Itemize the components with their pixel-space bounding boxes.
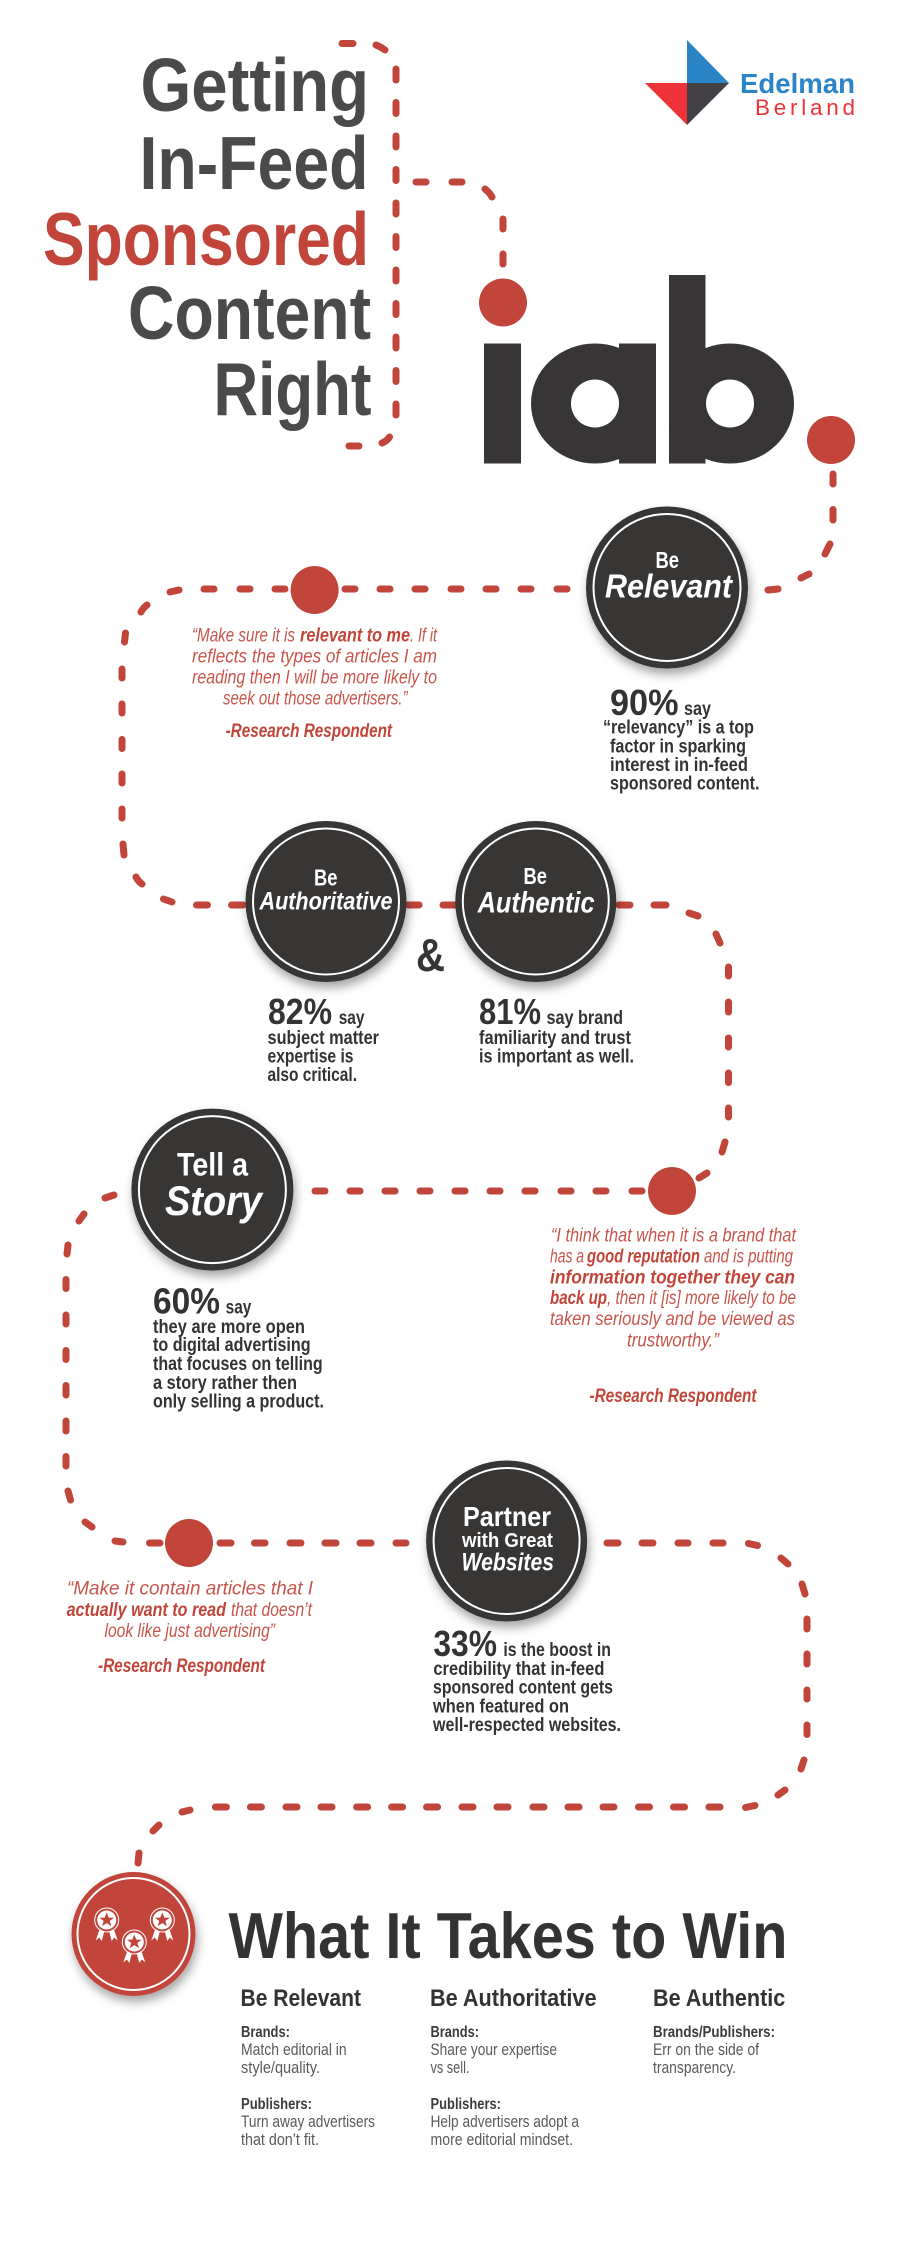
stat: 90%: interest in in-feed	[610, 754, 748, 776]
badge: Partner with Great Websites	[426, 1460, 587, 1622]
quote: good reputation: trustworthy.”	[627, 1331, 720, 1352]
dashed path: story to partner	[66, 1195, 406, 1543]
quote: actually want to read: that doesn’t	[231, 1600, 313, 1621]
stat: 33%: credibility that in-feed	[433, 1658, 604, 1680]
stat: 90%: say	[684, 698, 711, 720]
stat: 60%: 60%	[153, 1280, 220, 1321]
badge: Be Authentic: Be	[524, 863, 547, 889]
stat: 33%	[432, 1623, 621, 1736]
quote: relevant to me: . If it	[410, 626, 438, 647]
logo: Edelman Berland	[645, 40, 855, 125]
quote: relevant to me: seek out those advertisers.”	[223, 689, 409, 710]
quote: good reputation: -Research Respondent	[590, 1386, 757, 1407]
quote: actually want to read: look like just advertising”	[104, 1621, 276, 1642]
quote: actually want to read	[67, 1579, 314, 1677]
red dot: quote 3	[165, 1519, 213, 1567]
column: Be Authoritative: Be Authoritative	[430, 1985, 596, 2012]
stat: 33%: well-respected websites.	[432, 1714, 621, 1736]
stat: 33%: when featured on	[432, 1695, 569, 1717]
quote: relevant to me	[192, 626, 438, 742]
stat: 82%: also critical.	[268, 1064, 357, 1086]
column: Be Authentic: transparency.	[653, 2059, 736, 2077]
logo: Edelman Berland: Edelman	[740, 68, 855, 99]
icon: medal center	[122, 1930, 146, 1963]
stat: 81%: is important as well.	[479, 1046, 634, 1068]
red dot: quote 2	[648, 1167, 696, 1215]
title: In-Feed	[140, 121, 368, 205]
stat: 33%: 33%	[433, 1623, 497, 1664]
stat: 60%: they are more open	[153, 1316, 305, 1338]
column: Be Authoritative: vs sell.	[430, 2059, 470, 2077]
title: Sponsored	[43, 197, 369, 281]
stat: 90%: sponsored content.	[610, 773, 760, 795]
column: Be Authoritative: Help advertisers adopt a	[430, 2113, 580, 2131]
column: Be Authentic	[653, 1985, 785, 2077]
badge: Be Relevant	[586, 506, 748, 668]
stat: 60%: to digital advertising	[153, 1334, 311, 1356]
quote: relevant to me: reflects the types of articles I am	[192, 647, 437, 668]
quote: good reputation: and is putting	[704, 1246, 793, 1268]
icon: medal right	[150, 1908, 174, 1941]
badge: Be Authoritative: Be	[314, 864, 338, 890]
quote: relevant to me: -Research Respondent	[226, 721, 393, 742]
column: Be Authoritative: Publishers:	[430, 2096, 501, 2113]
quote: good reputation: information together they can	[550, 1268, 795, 1289]
stat: 60%: a story rather then	[153, 1372, 297, 1394]
column: Be Authoritative: more editorial mindset.	[430, 2131, 573, 2149]
badge: Partner with Great Websites: Websites	[462, 1549, 554, 1577]
ampersand: &	[416, 929, 445, 981]
stat: 33%: is the boost in	[503, 1639, 611, 1661]
stat: 60%: say	[226, 1296, 252, 1318]
quote: actually want to read: “Make it contain articles that I	[67, 1579, 314, 1600]
stat: 60%: only selling a product.	[153, 1391, 324, 1413]
quote: relevant to me: reading then I will be more likely to	[192, 668, 437, 689]
badge: Be Authoritative	[246, 821, 406, 982]
quote: good reputation: taken seriously and be viewed as	[550, 1309, 795, 1330]
dashed path: relevant to authoritative	[122, 589, 567, 905]
column: Be Relevant: that don’t fit.	[241, 2131, 319, 2149]
badge: Be Relevant: Be	[656, 547, 679, 573]
logo: iab	[484, 275, 794, 464]
column: Be Authoritative: Share your expertise	[430, 2041, 557, 2059]
badge: Tell a Story	[131, 1109, 293, 1271]
stat: 82%: 82%	[268, 991, 332, 1032]
column: Be Relevant: style/quality.	[241, 2059, 320, 2077]
column: Be Authoritative: Brands:	[430, 2024, 479, 2041]
column: Be Relevant: Publishers:	[241, 2096, 312, 2113]
quote: relevant to me: relevant to me	[300, 626, 410, 647]
stat: 82%	[268, 991, 379, 1086]
column: Be Authentic: Err on the side of	[653, 2041, 759, 2059]
column: Be Authoritative	[430, 1985, 596, 2149]
quote: good reputation: good reputation	[586, 1246, 700, 1268]
stat: 81%: say brand	[546, 1007, 623, 1029]
quote: good reputation: has a	[550, 1246, 584, 1268]
quote: good reputation: , then it [is] more likely to be	[607, 1288, 796, 1309]
title: Getting	[140, 43, 369, 127]
stat: 81%	[479, 991, 634, 1068]
stat: 90%	[603, 682, 760, 795]
quote: actually want to read: -Research Respondent	[98, 1656, 266, 1677]
stat: 90%: “relevancy” is a top	[603, 716, 754, 738]
quote: good reputation: back up	[550, 1288, 607, 1309]
stat: 81%: familiarity and trust	[479, 1027, 631, 1049]
title	[43, 43, 372, 431]
stat: 90%: factor in sparking	[610, 736, 746, 758]
stat: 81%: 81%	[479, 991, 541, 1032]
quote: good reputation: “I think that when it is a brand that	[551, 1226, 797, 1246]
quote: actually want to read: actually want to read	[67, 1600, 226, 1621]
stat: 60%: that focuses on telling	[153, 1353, 323, 1375]
stat: 82%: expertise is	[268, 1046, 354, 1068]
badge: Be Relevant: Relevant	[605, 568, 734, 605]
heading: What It Takes to Win: What It Takes to Win	[228, 1899, 788, 1972]
quote: good reputation	[550, 1226, 797, 1407]
badge: Partner with Great Websites: Partner	[463, 1501, 551, 1532]
logo: Edelman Berland: Berland	[755, 95, 855, 120]
column: Be Relevant: Be Relevant	[240, 1985, 361, 2012]
badge: Tell a Story: Tell a	[177, 1147, 248, 1183]
column: Be Relevant	[240, 1985, 375, 2149]
stat: 33%: sponsored content gets	[433, 1677, 613, 1699]
stat: 60%	[153, 1280, 324, 1413]
dashed path: title bracket	[342, 44, 396, 446]
column: Be Relevant: Brands:	[241, 2024, 290, 2041]
title: Right	[214, 347, 372, 431]
badge: Be Authentic: Authentic	[477, 886, 595, 920]
dashed path: authoritative to story	[315, 905, 728, 1191]
dashed path: iab to relevant	[768, 474, 833, 590]
stat: 82%: subject matter	[268, 1027, 379, 1049]
dashed path: partner to win badge	[138, 1543, 807, 1863]
red dot: quote 1	[291, 566, 339, 614]
column: Be Relevant: Match editorial in	[241, 2041, 347, 2059]
title: Content	[128, 271, 371, 355]
column: Be Authentic: Brands/Publishers:	[653, 2024, 775, 2041]
badge: winner ribbons	[72, 1872, 196, 1996]
badge: Be Authentic	[455, 821, 616, 982]
badge: Tell a Story: Story	[165, 1177, 264, 1224]
red dot: iab period	[807, 416, 855, 464]
dashed path: to iab dot	[416, 182, 503, 264]
badge: Partner with Great Websites: with Great	[461, 1530, 553, 1552]
column: Be Relevant: Turn away advertisers	[241, 2113, 375, 2131]
badge: Be Authoritative: Authoritative	[259, 888, 393, 916]
red dot: iab i	[479, 278, 527, 326]
column: Be Authentic: Be Authentic	[653, 1985, 785, 2012]
icon: medal left	[95, 1908, 119, 1941]
stat: 90%: 90%	[610, 682, 678, 723]
stat: 82%: say	[339, 1007, 365, 1029]
quote: relevant to me: “Make sure it is	[192, 626, 295, 647]
